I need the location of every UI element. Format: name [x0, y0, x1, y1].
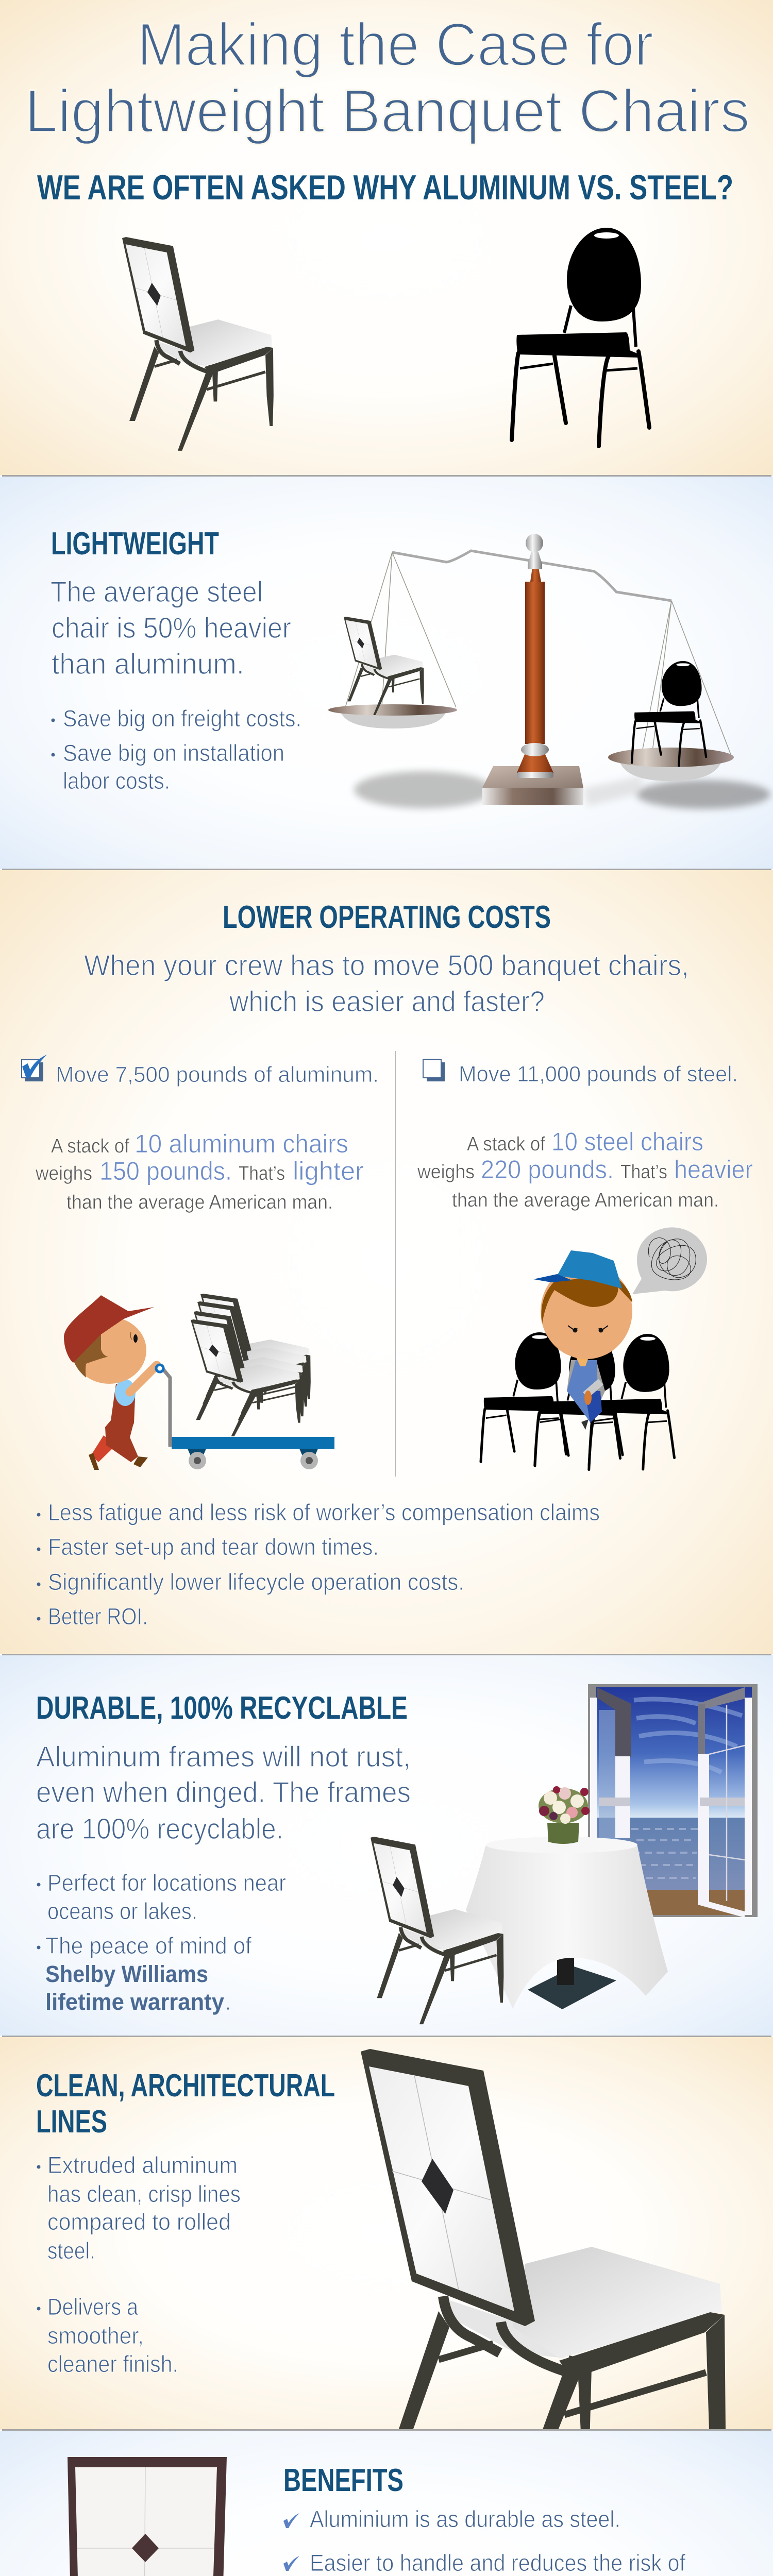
bullet list: operating benefits: Significantly lower lifecycle operation costs. — [48, 1569, 464, 1595]
bullet list: extruded aluminum — [37, 2152, 241, 2377]
bullet list: extruded aluminum: cleaner finish. — [47, 2351, 178, 2377]
panel: intro — [0, 0, 773, 476]
text: steel stack: That’s — [620, 1161, 667, 1183]
text: aluminum option: Move 7,500 pounds of aluminum. — [56, 1062, 379, 1087]
title: Lightweight Banquet Chairs — [25, 77, 750, 145]
icon: aluminum chair — [122, 237, 274, 451]
illustration: worker pushing aluminum chairs — [64, 1294, 334, 1470]
bullet list: operating benefits: Better ROI. — [48, 1603, 148, 1630]
bullet list: durability: The peace of mind of — [45, 1933, 251, 1959]
text: frames will not rust: are 100% recyclable. — [36, 1812, 283, 1845]
illustration: tired worker on steel chairs — [481, 1250, 675, 1470]
text: steel stack: weighs — [417, 1161, 475, 1183]
text: aluminum stack — [35, 1129, 364, 1213]
bullet list: durability: Perfect for locations near — [47, 1870, 286, 1896]
text: steel stack: heavier — [674, 1155, 753, 1184]
text: aluminum stack: lighter — [293, 1157, 364, 1185]
bullet list: durability: oceans or lakes. — [47, 1898, 197, 1924]
icon: checked box — [22, 1055, 47, 1081]
illustration: open window over sea — [588, 1684, 758, 1918]
heading: durable: DURABLE, 100% RECYCLABLE — [36, 1690, 408, 1726]
text: steel chair is heavier: than aluminum. — [52, 648, 244, 681]
bullet list: extruded aluminum: smoother, — [47, 2323, 144, 2349]
illustration: chair front view — [60, 2457, 236, 2576]
text: steel chair is heavier: chair is 50% heavier — [52, 612, 291, 645]
text: aluminum stack: 150 pounds. — [99, 1157, 232, 1185]
panel: benefits — [0, 2431, 773, 2576]
panel: clean architectural lines — [0, 2037, 773, 2430]
panel: lower operating costs — [0, 870, 773, 1654]
text: frames will not rust: Aluminum frames will not rust, — [36, 1740, 411, 1773]
text: crew question — [84, 949, 689, 1018]
text: aluminum stack: weighs — [35, 1163, 92, 1184]
illustration: large aluminum chair — [361, 2049, 726, 2429]
bullet list: operating benefits: Less fatigue and less risk of worker’s compensation claims — [48, 1499, 600, 1526]
text: steel option: Move 11,000 pounds of steel. — [459, 1062, 738, 1087]
text: aluminum stack: than the average American man. — [66, 1192, 333, 1213]
bullet list: extruded aluminum: Extruded aluminum — [47, 2152, 238, 2178]
text: steel chair is heavier — [51, 575, 291, 681]
text: steel stack — [417, 1127, 753, 1211]
heading: clean architectural lines — [36, 2068, 335, 2140]
checklist: benefits — [283, 2506, 725, 2576]
bullet list: savings: Save big on freight costs. — [63, 705, 301, 732]
heading: lower operating costs: LOWER OPERATING COSTS — [223, 900, 551, 935]
heading: lightweight: LIGHTWEIGHT — [51, 526, 219, 562]
icon: chair by table — [371, 1837, 503, 2024]
bullet list: extruded aluminum: steel. — [47, 2238, 95, 2264]
heading: clean architectural lines: CLEAN, ARCHITECTURAL — [36, 2068, 335, 2104]
bullet list: extruded aluminum: has clean, crisp lines — [47, 2181, 241, 2207]
text: steel stack: than the average American man. — [452, 1190, 719, 1211]
bullet list: durability: Shelby Williams — [45, 1961, 208, 1987]
bullet list: savings: labor costs. — [63, 768, 170, 794]
text: aluminum stack: A stack of — [51, 1136, 129, 1157]
text: frames will not rust: even when dinged. The frames — [36, 1776, 411, 1809]
panel: lightweight — [0, 477, 773, 869]
bullet list: durability: . — [225, 1989, 231, 2015]
illustration: balance scale — [328, 534, 770, 809]
text: steel chair is heavier: The average steel — [51, 575, 263, 608]
illustration: table with cloth and flowers — [466, 1786, 668, 2009]
bullet list: savings: Save big on installation — [63, 740, 284, 766]
icon: steel chair silhouette — [512, 228, 649, 446]
title: Making the Case for — [137, 11, 653, 79]
bullet list: durability — [37, 1870, 286, 2015]
bullet list: operating benefits: Faster set-up and tear down times. — [48, 1534, 379, 1560]
panel: durable, recyclable — [0, 1655, 773, 2036]
heading: benefits: BENEFITS — [283, 2463, 404, 2498]
text: steel stack: A stack of — [467, 1133, 545, 1155]
text: crew question: When your crew has to move 500 banquet chairs, — [84, 949, 689, 982]
bullet list: operating benefits — [37, 1499, 600, 1630]
bullet list: durability: lifetime warranty — [45, 1989, 224, 2015]
bullet list: extruded aluminum: compared to rolled — [47, 2209, 231, 2235]
icon: thought bubble with scribble — [632, 1227, 707, 1294]
heading: clean architectural lines: LINES — [36, 2104, 107, 2140]
text: crew question: which is easier and faster? — [229, 985, 545, 1018]
text: aluminum stack: That’s — [239, 1163, 285, 1184]
text: frames will not rust — [36, 1740, 411, 1845]
checklist: benefits: Easier to handle and reduces the risk of — [310, 2550, 685, 2576]
icon: empty box — [423, 1059, 445, 1081]
text: aluminum stack: 10 aluminum chairs — [135, 1129, 348, 1158]
text: steel stack: 220 pounds. — [481, 1155, 614, 1184]
bullet list: savings — [52, 705, 301, 794]
title — [25, 11, 750, 145]
bullet list: extruded aluminum: Delivers a — [47, 2294, 139, 2320]
checklist: benefits: Aluminium is as durable as steel. — [310, 2506, 620, 2532]
text: steel stack: 10 steel chairs — [551, 1127, 703, 1156]
